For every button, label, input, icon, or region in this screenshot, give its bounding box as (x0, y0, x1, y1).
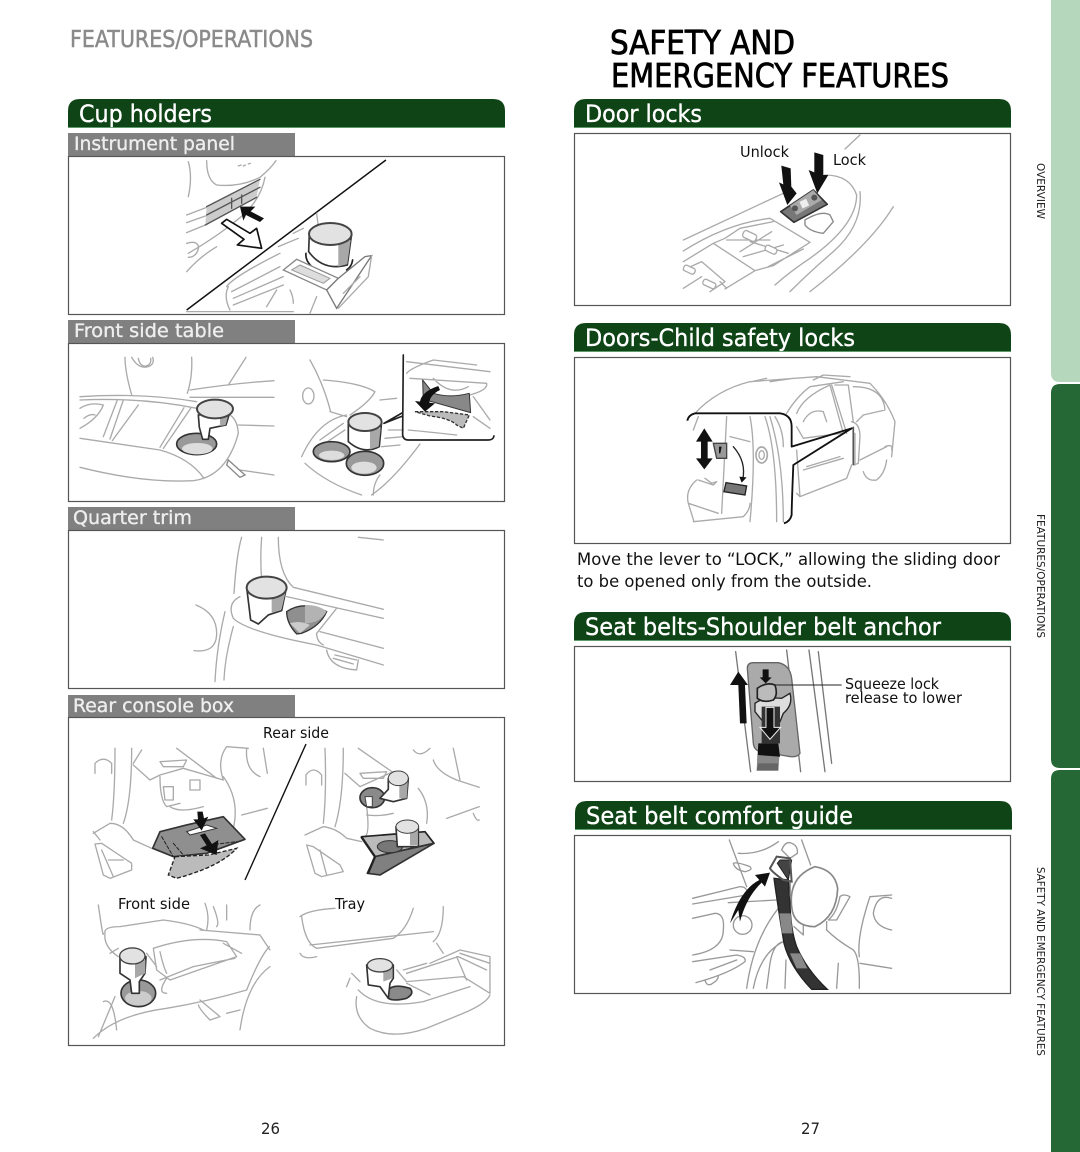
heading: Door locks (574, 99, 1011, 128)
label: Unlock: Unlock (740, 143, 789, 161)
page number 26: 26 (261, 1119, 280, 1138)
illustration: belt anchor (730, 650, 842, 772)
label: Squeeze lock release to lower: Squeeze lock (845, 675, 939, 693)
body text: child lock instructions: Move the lever to “LOCK,” allowing the sliding door (577, 550, 1000, 570)
illustration: rear side open with tray (305, 748, 479, 877)
label: Rear side: Rear side (263, 724, 329, 742)
page title: SAFETY AND (610, 23, 795, 62)
side tab: safety and emergency features: SAFETY AND EMERGENCY FEATURES (1034, 867, 1047, 1056)
illustration: front side (93, 903, 270, 1038)
section label: FEATURES/OPERATIONS: FEATURES/OPERATIONS (70, 27, 313, 53)
illustration: door lock switch (683, 135, 893, 292)
label: Front side: Front side (118, 895, 190, 913)
heading: Seat belts-Shoulder belt anchor: Seat belts-Shoulder belt anchor (585, 613, 941, 641)
heading: Door locks: Door locks (585, 100, 702, 128)
subheading: Quarter trim: Quarter trim (73, 507, 192, 529)
label: Squeeze lock release to lower (845, 675, 963, 707)
panel: front side table (68, 344, 504, 502)
side tab: overview: OVERVIEW (1034, 163, 1047, 219)
heading: Cup holders: Cup holders (79, 100, 212, 128)
subheading: Quarter trim (68, 507, 295, 530)
panel: shoulder belt anchor (574, 646, 1010, 782)
subheading: Rear console box: Rear console box (73, 695, 234, 717)
subheading: Instrument panel (68, 133, 295, 156)
page title (610, 23, 949, 95)
body text: child lock instructions: to be opened only from the outside. (577, 572, 872, 592)
side tab: safety and emergency features (1034, 770, 1080, 1152)
illustration: instrument panel cup holder (187, 160, 386, 313)
panel: instrument panel (68, 156, 504, 314)
illustration: comfort guide (693, 840, 892, 989)
side tab: features/operations: FEATURES/OPERATIONS (1034, 514, 1047, 638)
label: Tray: Tray (334, 895, 365, 913)
heading: Seat belt comfort guide (575, 801, 1012, 830)
panel: door locks (574, 134, 1010, 306)
illustration: tray (300, 907, 490, 1034)
subheading: Front side table: Front side table (74, 320, 224, 342)
illustration: side table right view with callout (302, 355, 494, 495)
panel: quarter trim (68, 530, 504, 688)
heading: Doors-Child safety locks (574, 323, 1011, 352)
side tab: features/operations (1034, 384, 1080, 768)
panel: doors child safety locks (574, 358, 1010, 544)
illustration: rear side closed (93, 747, 267, 878)
page number 27: 27 (801, 1119, 820, 1138)
illustration: side table left view (80, 357, 274, 481)
illustration: quarter trim cup holder (194, 537, 383, 682)
subheading: Front side table (68, 320, 295, 343)
subheading: Instrument panel: Instrument panel (74, 133, 235, 155)
illustration: van with child lock (687, 375, 895, 523)
heading: Cup holders (68, 99, 505, 128)
side tab: overview (1034, 0, 1080, 382)
panel: seat belt comfort guide (574, 836, 1010, 994)
heading: Doors-Child safety locks: Doors-Child safety locks (585, 324, 855, 352)
label: Squeeze lock release to lower: release to lower (845, 689, 963, 707)
panel: rear console box (68, 718, 504, 1046)
body text: child lock instructions (577, 550, 1000, 592)
divider line between rear views (245, 744, 306, 880)
label: Lock: Lock (833, 151, 866, 169)
heading: Seat belt comfort guide: Seat belt comfort guide (586, 802, 853, 830)
page title: EMERGENCY FEATURES (611, 56, 949, 95)
